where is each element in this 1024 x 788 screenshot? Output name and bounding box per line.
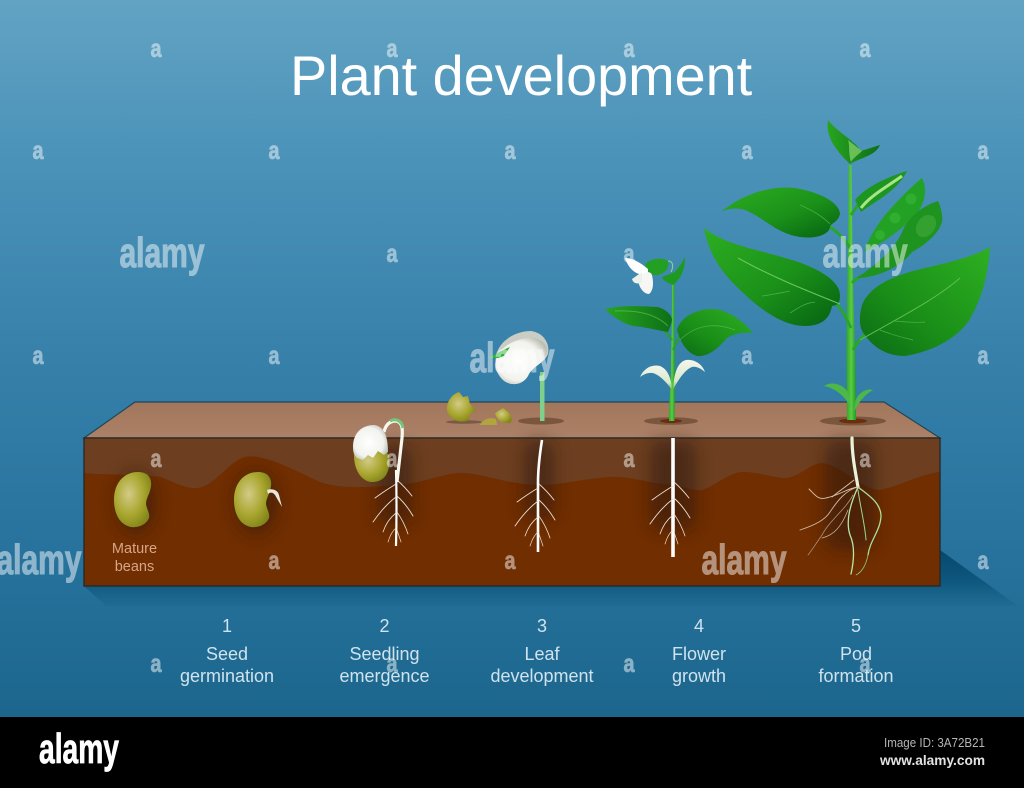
watermarks: a <box>504 137 516 165</box>
soil front lower layer <box>84 456 940 586</box>
plant 3: leaf development <box>488 331 564 552</box>
step 3 label: Leaf <box>524 644 561 664</box>
root <box>671 438 675 557</box>
pod 2 <box>857 201 942 278</box>
plant 5: pod formation <box>704 120 990 575</box>
watermarks: a <box>624 35 635 63</box>
step 5 label: formation <box>818 666 894 686</box>
right leaf <box>677 309 753 356</box>
label: mature beans: Mature <box>112 541 157 557</box>
soil front upper layer <box>84 438 940 586</box>
watermarks: alamy <box>0 536 82 583</box>
watermarks: a <box>860 650 871 678</box>
pod 1 <box>864 178 925 252</box>
planting hole <box>518 418 564 424</box>
root system <box>800 438 881 575</box>
young leaf <box>488 347 510 358</box>
watermarks: a <box>860 35 871 63</box>
watermarks: a <box>386 445 398 473</box>
step 5 label: Pod <box>840 644 872 664</box>
soil top surface <box>84 402 940 438</box>
planting hole <box>820 416 886 426</box>
watermarks: a <box>268 137 280 165</box>
label: mature beans <box>112 541 157 575</box>
step 2 label <box>339 616 430 686</box>
plant 2: seedling emergence <box>353 420 413 546</box>
step 5 label <box>818 616 894 686</box>
watermarks: a <box>978 342 989 370</box>
watermarks: a <box>742 137 753 165</box>
watermarks: a <box>386 240 398 268</box>
white cotyledon <box>353 425 388 460</box>
planting hole <box>644 417 698 425</box>
step labels <box>180 616 894 686</box>
watermarks: a <box>150 445 162 473</box>
root <box>538 440 542 552</box>
step 4 label: Flower <box>672 644 726 664</box>
watermarks: alamy <box>702 536 787 583</box>
step 1 label: Seed <box>206 644 248 664</box>
seed coat <box>354 446 389 482</box>
step 1 label: germination <box>180 666 274 686</box>
panel: soil block <box>84 402 940 586</box>
white cotyledons <box>640 365 672 390</box>
watermarks: alamy <box>822 229 908 276</box>
watermarks: a <box>386 650 398 678</box>
upper leaf <box>720 187 840 238</box>
block shadow <box>84 550 1018 606</box>
step 1 label <box>180 616 274 686</box>
watermarks: a <box>150 650 162 678</box>
watermarks: a <box>978 137 989 165</box>
root <box>395 470 398 546</box>
step 5 label: 5 <box>851 616 861 636</box>
watermarks: a <box>32 137 44 165</box>
base leaves <box>824 384 851 408</box>
seed shell pieces <box>446 392 512 425</box>
step 2 label: emergence <box>339 666 430 686</box>
watermarks: a <box>624 445 635 473</box>
watermarks: a <box>150 35 162 63</box>
large right leaf <box>860 247 990 356</box>
plant 4: flower growth <box>605 257 753 557</box>
step 3 label <box>490 616 594 686</box>
stem <box>669 283 675 421</box>
watermarks: a <box>32 342 44 370</box>
white bean <box>495 331 548 384</box>
step 3 label: 3 <box>537 616 547 636</box>
left leaf <box>605 306 672 332</box>
watermarks <box>0 35 989 678</box>
main stem <box>847 165 856 420</box>
watermarks: a <box>742 342 753 370</box>
step 2 label: 2 <box>379 616 390 636</box>
watermarks: a <box>504 547 516 575</box>
step 4 label: 4 <box>694 616 704 636</box>
flower <box>625 258 673 294</box>
title: Plant development <box>290 44 753 107</box>
website: www.alamy.com <box>879 752 985 768</box>
step 2 label: Seedling <box>349 644 420 664</box>
footer logo: alamy <box>39 725 119 772</box>
small leaf <box>855 171 907 212</box>
petioles <box>827 205 868 350</box>
bean 2: germinating seed <box>234 472 282 527</box>
stem <box>540 372 544 421</box>
shoot <box>384 421 402 482</box>
image id: Image ID: 3A72B21 <box>884 735 985 750</box>
watermarks: a <box>268 342 280 370</box>
large left leaf <box>704 228 840 326</box>
watermarks: alamy <box>120 229 205 276</box>
watermarks: alamy <box>470 334 555 381</box>
step 1 label: 1 <box>222 616 232 636</box>
top bud <box>827 120 880 164</box>
bean 1: mature bean <box>112 472 157 575</box>
watermarks: a <box>624 650 635 678</box>
step 3 label: development <box>490 666 594 686</box>
step 4 label <box>672 616 726 686</box>
top bud <box>662 257 685 285</box>
watermarks: a <box>624 240 635 268</box>
footer bar <box>0 717 1024 788</box>
watermarks: a <box>386 35 398 63</box>
label: mature beans: beans <box>115 559 154 575</box>
watermarks: a <box>978 547 989 575</box>
step 4 label: growth <box>672 666 726 686</box>
watermarks: a <box>860 445 871 473</box>
watermarks: a <box>268 547 280 575</box>
root shadows <box>117 440 875 550</box>
